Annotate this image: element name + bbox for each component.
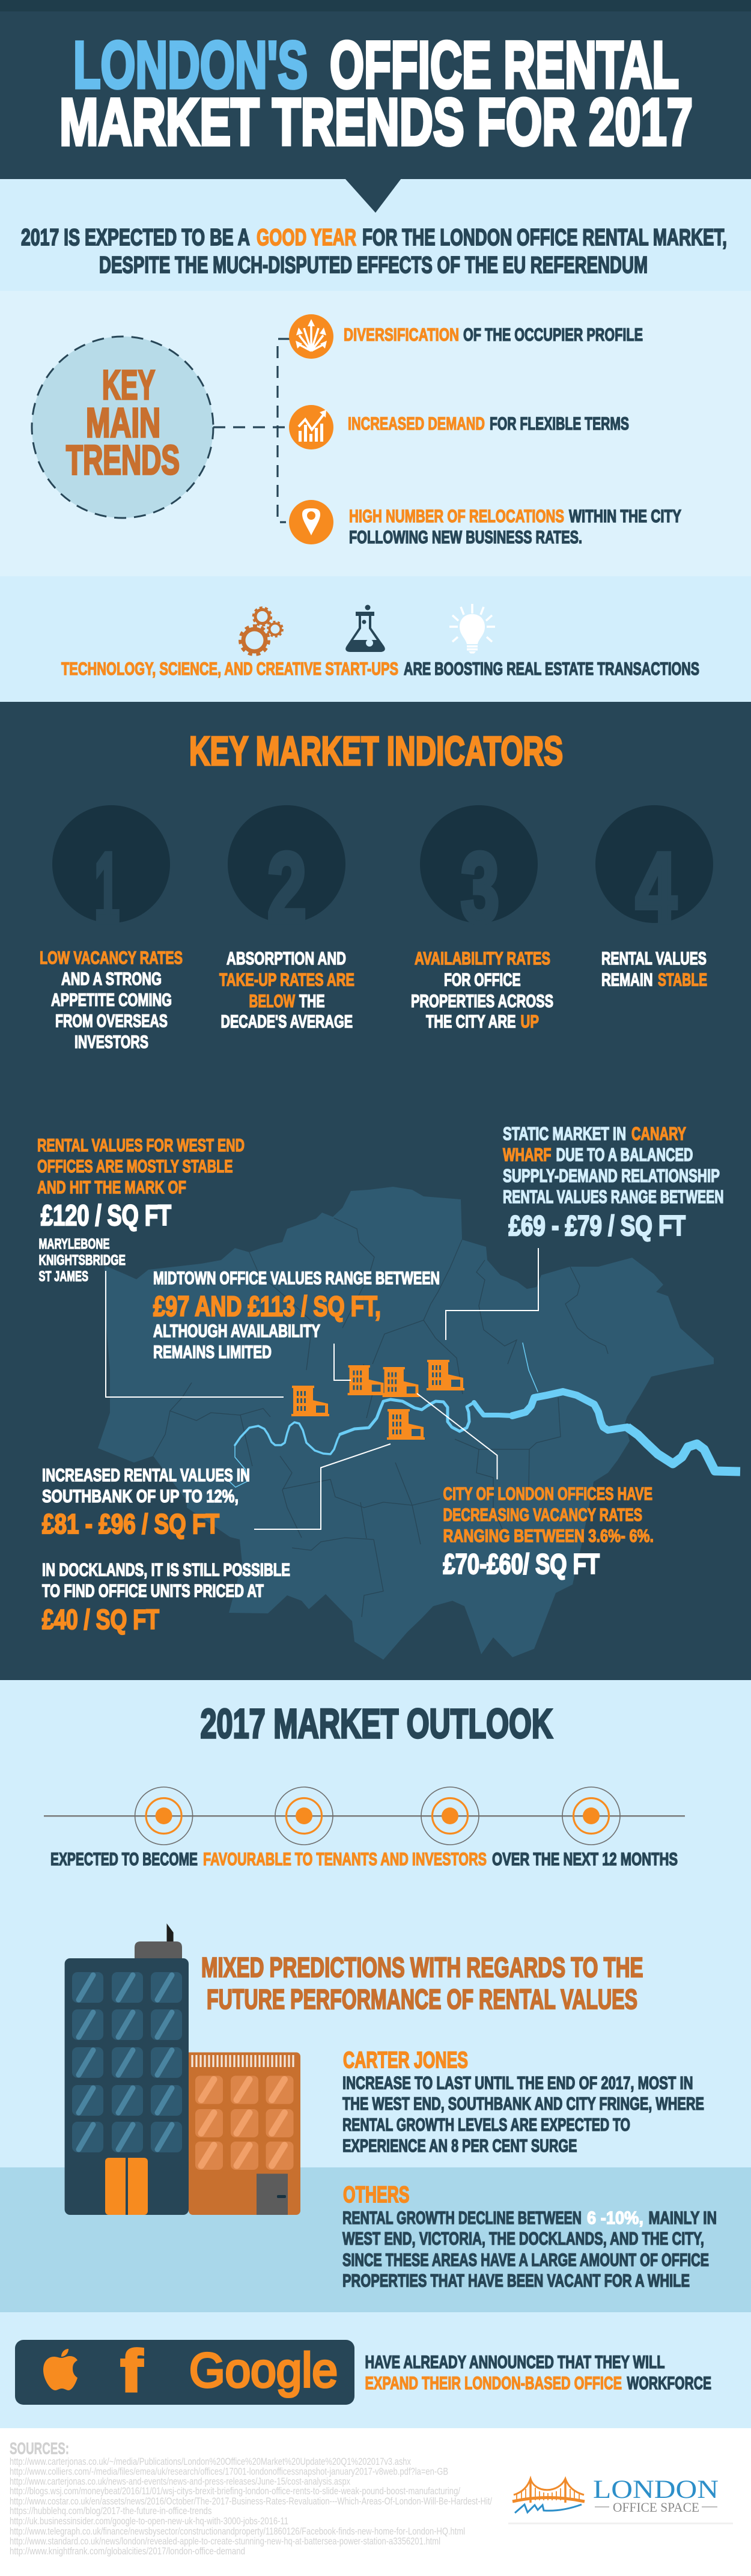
trend 2 text: FOR FLEXIBLE TERMS	[490, 414, 629, 434]
indicator 2: BELOW	[249, 991, 295, 1011]
prediction: others: OTHERS	[343, 2182, 410, 2208]
logo: london office space: OFFICE SPACE	[613, 2500, 699, 2515]
callout: west end: AND HIT THE MARK OF	[37, 1178, 186, 1198]
speech bubble pointer	[345, 178, 401, 213]
map: boroughs	[98, 1187, 714, 1660]
callout: canary wharf: £69 - £79 / SQ FT	[508, 1210, 686, 1242]
prediction: others: 6 -10%,	[587, 2208, 643, 2228]
outlook text: FAVOURABLE TO TENANTS AND INVESTORS	[203, 1850, 487, 1869]
callout: west end: £120 / SQ FT	[41, 1200, 171, 1232]
sources: http://www.knightfrank.com/globalcities/2017/london-office-demand	[10, 2545, 245, 2557]
key main trends circle: MAIN	[86, 400, 160, 446]
map of london	[98, 1187, 740, 1660]
callout: city of london: DECREASING VACANCY RATES	[443, 1505, 642, 1525]
sources: SOURCES:	[10, 2439, 69, 2458]
callout: canary wharf: STATIC MARKET IN	[503, 1123, 626, 1144]
callout: city of london: £70-£60/ SQ FT	[443, 1548, 600, 1580]
sources: https://hubblehq.com/blog/2017-the-future-in-office-trends	[10, 2505, 211, 2517]
key main trends circle	[32, 336, 213, 518]
icon: diversification arrows	[289, 314, 333, 359]
indicator 2: TAKE-UP RATES ARE	[219, 970, 354, 990]
sources: http://uk.businessinsider.com/google-to-open-new-uk-hq-with-3000-jobs-2016-11	[10, 2515, 288, 2527]
indicator 2: 2	[267, 832, 306, 943]
callout: canary wharf	[503, 1123, 723, 1242]
intro statement	[21, 225, 727, 278]
sources: http://blogs.wsj.com/moneybeat/2016/11/01/wsj-citys-brexit-briefing-london-office-rents-to-slide-weak-pound-boost-manufacturing/	[10, 2485, 460, 2497]
callout: city of london	[443, 1484, 654, 1580]
indicator 4: 4	[636, 832, 677, 943]
trend 1 text: DIVERSIFICATION	[344, 325, 459, 345]
heading: key market indicators: KEY MARKET INDICATORS	[189, 728, 563, 774]
indicator 1: FROM OVERSEAS	[55, 1011, 168, 1031]
logo: google: Google	[189, 2343, 338, 2398]
title	[59, 28, 693, 159]
indicator 1	[40, 805, 183, 1052]
indicator 1: APPETITE COMING	[51, 990, 172, 1010]
callout: west end: OFFICES ARE MOSTLY STABLE	[37, 1157, 233, 1177]
intro statement: 2017 IS EXPECTED TO BE A	[21, 225, 250, 251]
map: callout leader lines	[106, 1248, 538, 1529]
callout: west end	[37, 1136, 245, 1285]
sources: http://www.costar.co.uk/en/assets/news/2016/October/The-2017-Business-Rates-Revaluation---Which-Areas-Of-London-Will-Be-Hardest-Hit/	[10, 2495, 492, 2507]
indicator 1: 1	[94, 832, 120, 943]
outlook text: EXPECTED TO BECOME	[50, 1850, 198, 1869]
heading: mixed predictions	[201, 1952, 643, 2015]
callout: midtown: ALTHOUGH AVAILABILITY	[153, 1321, 320, 1341]
intro statement: GOOD YEAR	[257, 225, 356, 251]
indicator 4: REMAIN	[601, 970, 652, 990]
indicator 3: AVAILABILITY RATES	[415, 949, 550, 969]
heading: 2017 market outlook: 2017 MARKET OUTLOOK	[201, 1701, 553, 1747]
logo: london office space: LONDON	[593, 2476, 719, 2504]
callout: docklands: £40 / SQ FT	[42, 1604, 159, 1635]
prediction: carter jones	[342, 2048, 704, 2156]
sources: http://www.standard.co.uk/news/london/revealed-apple-to-create-stunning-new-hq-at-battersea-power-station-a3356201.html	[10, 2536, 440, 2547]
expansion statement	[365, 2352, 711, 2393]
callout: southbank	[42, 1466, 250, 1539]
indicator 3: FOR OFFICE	[444, 970, 520, 990]
trend 3 text	[349, 507, 681, 547]
callout: west end: RENTAL VALUES FOR WEST END	[37, 1136, 245, 1156]
trend 3 text: HIGH NUMBER OF RELOCATIONS	[349, 507, 564, 526]
key main trends circle: KEY	[102, 362, 155, 408]
outlook text	[50, 1850, 678, 1869]
callout: southbank: INCREASED RENTAL VALUES IN	[42, 1466, 250, 1485]
start-ups text: TECHNOLOGY, SCIENCE, AND CREATIVE START-UPS	[61, 659, 398, 679]
callout: west end: MARYLEBONE	[38, 1236, 109, 1252]
indicator 2: DECADE'S AVERAGE	[221, 1012, 353, 1032]
icon: light bulb	[449, 604, 495, 654]
callout: docklands: IN DOCKLANDS, IT IS STILL POSSIBLE	[42, 1560, 290, 1580]
indicator 4: RENTAL VALUES	[601, 949, 707, 969]
sources: http://www.colliers.com/-/media/files/emea/uk/research/offices/17001-londonofficessnapshot-january2017-v8web.pdf?la=en-GB	[10, 2466, 448, 2477]
indicator 1: INVESTORS	[74, 1032, 148, 1052]
indicator 4: STABLE	[658, 970, 707, 990]
prediction: carter jones: EXPERIENCE AN 8 PER CENT SURGE	[342, 2136, 577, 2156]
trend 1 text	[344, 325, 643, 345]
prediction: others	[342, 2182, 717, 2291]
indicator 1: AND A STRONG	[61, 969, 162, 989]
callout: midtown	[153, 1268, 440, 1362]
icon: bridge	[512, 2479, 585, 2513]
trend 1 text: OF THE OCCUPIER PROFILE	[463, 325, 643, 345]
panel: key main trends	[32, 314, 681, 547]
indicator 2	[219, 805, 354, 1032]
sources: http://www.carterjonas.co.uk/~/media/Publications/London%20Office%20Market%20Update%20Q1%202017v3.ashx	[10, 2456, 411, 2467]
callout: midtown: £97 AND £113 / SQ FT,	[153, 1291, 381, 1323]
icon: apple	[43, 2349, 78, 2390]
dashed connector	[213, 339, 290, 522]
title: LONDON'S	[73, 28, 308, 102]
sources	[10, 2439, 492, 2557]
callout: southbank: £81 - £96 / SQ FT	[42, 1508, 219, 1539]
panel: company logos	[15, 2338, 354, 2405]
indicator 3: UP	[520, 1012, 539, 1032]
map: borough boundaries	[153, 1218, 608, 1617]
indicator 3: 3	[461, 832, 499, 943]
expansion statement: WORKFORCE	[627, 2374, 711, 2393]
outlook text: OVER THE NEXT 12 MONTHS	[492, 1850, 678, 1869]
orange building	[189, 2053, 300, 2215]
icon: rising chart	[289, 405, 333, 449]
indicator 1: LOW VACANCY RATES	[40, 948, 183, 968]
callout: city of london: RANGING BETWEEN 3.6%- 6%.	[443, 1526, 654, 1546]
prediction: others: MAINLY IN	[649, 2208, 717, 2228]
map: river thames	[227, 1343, 740, 1487]
callout: city of london: CITY OF LONDON OFFICES HAVE	[443, 1484, 652, 1504]
map: office markers	[291, 1360, 464, 1440]
prediction: carter jones: RENTAL GROWTH LEVELS ARE EXPECTED TO	[342, 2115, 630, 2135]
trend 2 text: INCREASED DEMAND	[348, 414, 485, 434]
callout: west end: ST JAMES	[38, 1268, 88, 1285]
icon: location pin	[289, 500, 333, 544]
timeline with targets	[44, 1787, 685, 1845]
illustration: office buildings	[65, 1923, 300, 2215]
callout: docklands: TO FIND OFFICE UNITS PRICED AT	[42, 1582, 264, 1601]
callout: southbank: SOUTHBANK OF UP TO 12%,	[42, 1487, 239, 1506]
key main trends circle: TRENDS	[66, 437, 180, 483]
callout: docklands	[42, 1560, 290, 1635]
trend 3 text: WITHIN THE CITY	[569, 507, 681, 526]
callout: midtown: REMAINS LIMITED	[153, 1342, 272, 1362]
sources: http://www.carterjonas.co.uk/news-and-events/news-and-press-releases/June-15/cost-analysis.aspx	[10, 2476, 350, 2487]
callout: midtown: MIDTOWN OFFICE VALUES RANGE BETWEEN	[153, 1268, 440, 1288]
indicator 4	[595, 805, 713, 990]
indicator 3: PROPERTIES ACROSS	[411, 991, 553, 1011]
logo: london office space	[508, 2476, 733, 2524]
indicator 2: THE	[299, 991, 324, 1011]
callout: canary wharf: CANARY	[631, 1123, 686, 1144]
callout: west end: KNIGHTSBRIDGE	[38, 1252, 126, 1268]
trend 3 text: FOLLOWING NEW BUSINESS RATES.	[349, 528, 582, 547]
indicator 3: THE CITY ARE	[426, 1012, 515, 1032]
icon: science flask	[345, 604, 385, 652]
logo: facebook f: f	[121, 2338, 143, 2404]
expansion statement: EXPAND THEIR LONDON-BASED OFFICE	[365, 2374, 622, 2393]
sources: http://www.telegraph.co.uk/finance/newsbysector/constructionandproperty/11860126/Facebook-finds-new-home-for-London-HQ.html	[10, 2526, 465, 2537]
trend 2 text	[348, 414, 629, 434]
callout: canary wharf: WHARF	[503, 1144, 552, 1165]
callout: canary wharf: DUE TO A BALANCED	[556, 1144, 693, 1165]
prediction: carter jones: CARTER JONES	[343, 2048, 468, 2073]
indicator 3	[411, 805, 553, 1032]
icon: gears	[240, 607, 282, 655]
prediction: others: RENTAL GROWTH DECLINE BETWEEN	[342, 2208, 582, 2228]
dark tower	[65, 1923, 189, 2215]
indicator 2: ABSORPTION AND	[227, 949, 346, 969]
